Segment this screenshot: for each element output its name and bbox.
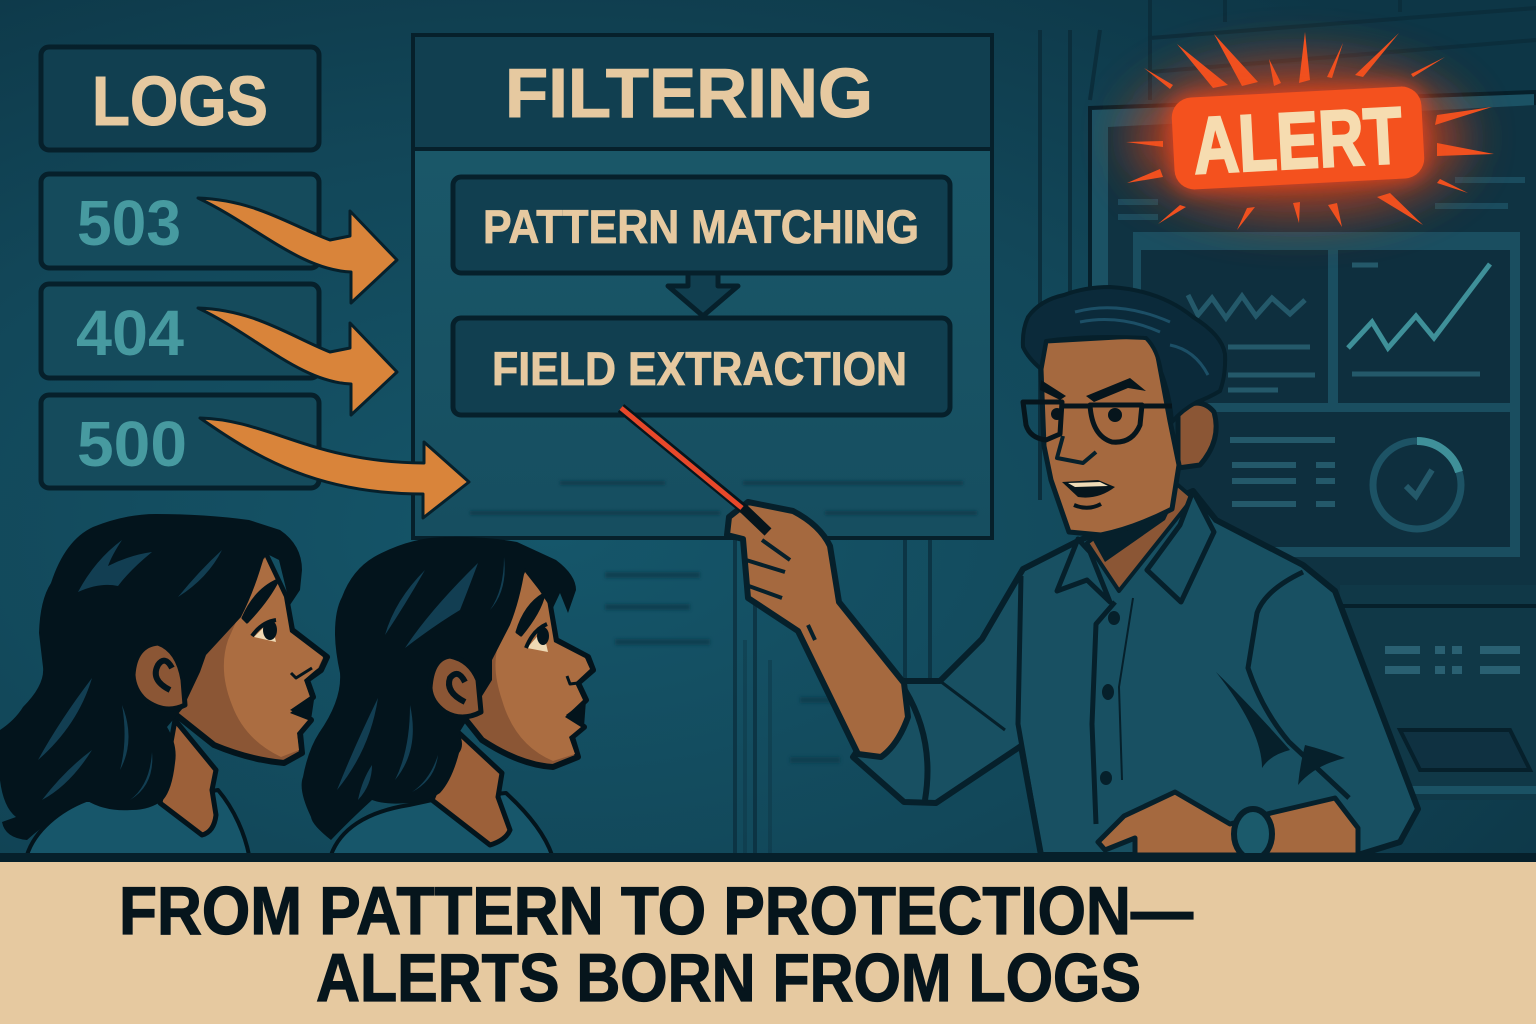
ear — [1178, 403, 1216, 468]
eye — [252, 620, 277, 642]
arrow: 500 to filtering — [200, 418, 469, 518]
finger lines — [746, 540, 815, 640]
panel: filtering — [413, 35, 992, 538]
dashboard frame — [1133, 232, 1520, 557]
dashboard side text lines — [1118, 180, 1525, 217]
shirt — [331, 793, 552, 855]
head — [1041, 335, 1179, 535]
shirt — [27, 790, 249, 855]
red pointer — [621, 408, 768, 532]
box: field extraction — [453, 318, 950, 415]
brow — [517, 594, 544, 635]
student right — [302, 537, 593, 855]
dashboard monitor — [1090, 92, 1536, 610]
ear — [133, 643, 185, 709]
face highlight — [495, 572, 590, 761]
hair highlights — [38, 540, 222, 800]
watch — [1234, 809, 1272, 859]
face — [170, 553, 327, 763]
faded lines below filtering panel — [605, 575, 850, 760]
collar — [1057, 491, 1214, 602]
hair — [0, 514, 302, 840]
dashboard chart panel right — [1338, 250, 1510, 403]
bottom banner — [0, 853, 1536, 1024]
log entry 503 — [41, 174, 319, 268]
alert glow — [1133, 63, 1463, 213]
log entry 500 — [41, 395, 319, 488]
alert label: ALERT — [1191, 91, 1404, 190]
panel: logs heading — [41, 47, 319, 150]
mouth — [1062, 480, 1115, 508]
arrow: pattern matching to field extraction — [668, 273, 738, 316]
filtering heading bar — [413, 35, 992, 149]
glasses — [1023, 402, 1172, 442]
eyes and brows — [1040, 378, 1146, 422]
mouth — [290, 693, 315, 720]
lower hand — [1098, 792, 1358, 855]
box: field extraction: FIELD EXTRACTION — [492, 342, 907, 395]
mouth — [566, 700, 586, 727]
panel: logs heading: LOGS — [92, 62, 268, 140]
neck — [1087, 480, 1193, 591]
dashboard gauge panel — [1141, 412, 1510, 547]
neck — [160, 720, 216, 835]
face — [450, 568, 593, 767]
box: pattern matching: PATTERN MATCHING — [483, 200, 919, 253]
face highlight — [224, 557, 323, 757]
inner ear — [449, 674, 465, 702]
faded lines on filtering panel — [470, 483, 977, 513]
log entry 503: 503 — [77, 187, 181, 259]
log entry 404: 404 — [76, 297, 184, 369]
neck — [432, 733, 510, 845]
box: pattern matching — [453, 177, 950, 273]
banner title: ALERTS BORN FROM LOGS — [316, 940, 1141, 1016]
log entry 404 — [41, 284, 319, 378]
student left — [0, 514, 327, 855]
filtering heading bar: FILTERING — [505, 54, 873, 132]
dashboard chart panel left — [1141, 250, 1328, 403]
alert badge — [1126, 32, 1494, 230]
banner title: FROM PATTERN TO PROTECTION— — [119, 873, 1193, 949]
hair highlights — [337, 557, 505, 800]
shirt — [853, 491, 1418, 855]
brow — [243, 580, 278, 622]
banner title — [119, 873, 1193, 1016]
alert burst rays — [1126, 32, 1494, 230]
presenter — [727, 287, 1418, 859]
hair highlights — [1075, 308, 1208, 375]
nose — [1057, 436, 1096, 463]
shirt details — [905, 572, 1349, 855]
neck shadow — [1090, 505, 1172, 562]
nose line — [291, 668, 312, 678]
arrow: 503 to filtering — [198, 198, 397, 303]
inner ear — [156, 661, 172, 690]
shirt shadow folds — [1216, 672, 1345, 785]
log entry 500: 500 — [77, 408, 187, 480]
keyboard console — [1340, 585, 1536, 800]
forearm and hand — [727, 502, 908, 757]
shirt buttons — [1100, 611, 1120, 785]
ear — [430, 656, 481, 717]
background wall panels — [735, 0, 1536, 855]
hair — [1023, 287, 1225, 422]
nose line — [567, 676, 578, 684]
arrow: 404 to filtering — [198, 308, 397, 415]
hair — [302, 537, 576, 840]
eye — [526, 624, 549, 652]
